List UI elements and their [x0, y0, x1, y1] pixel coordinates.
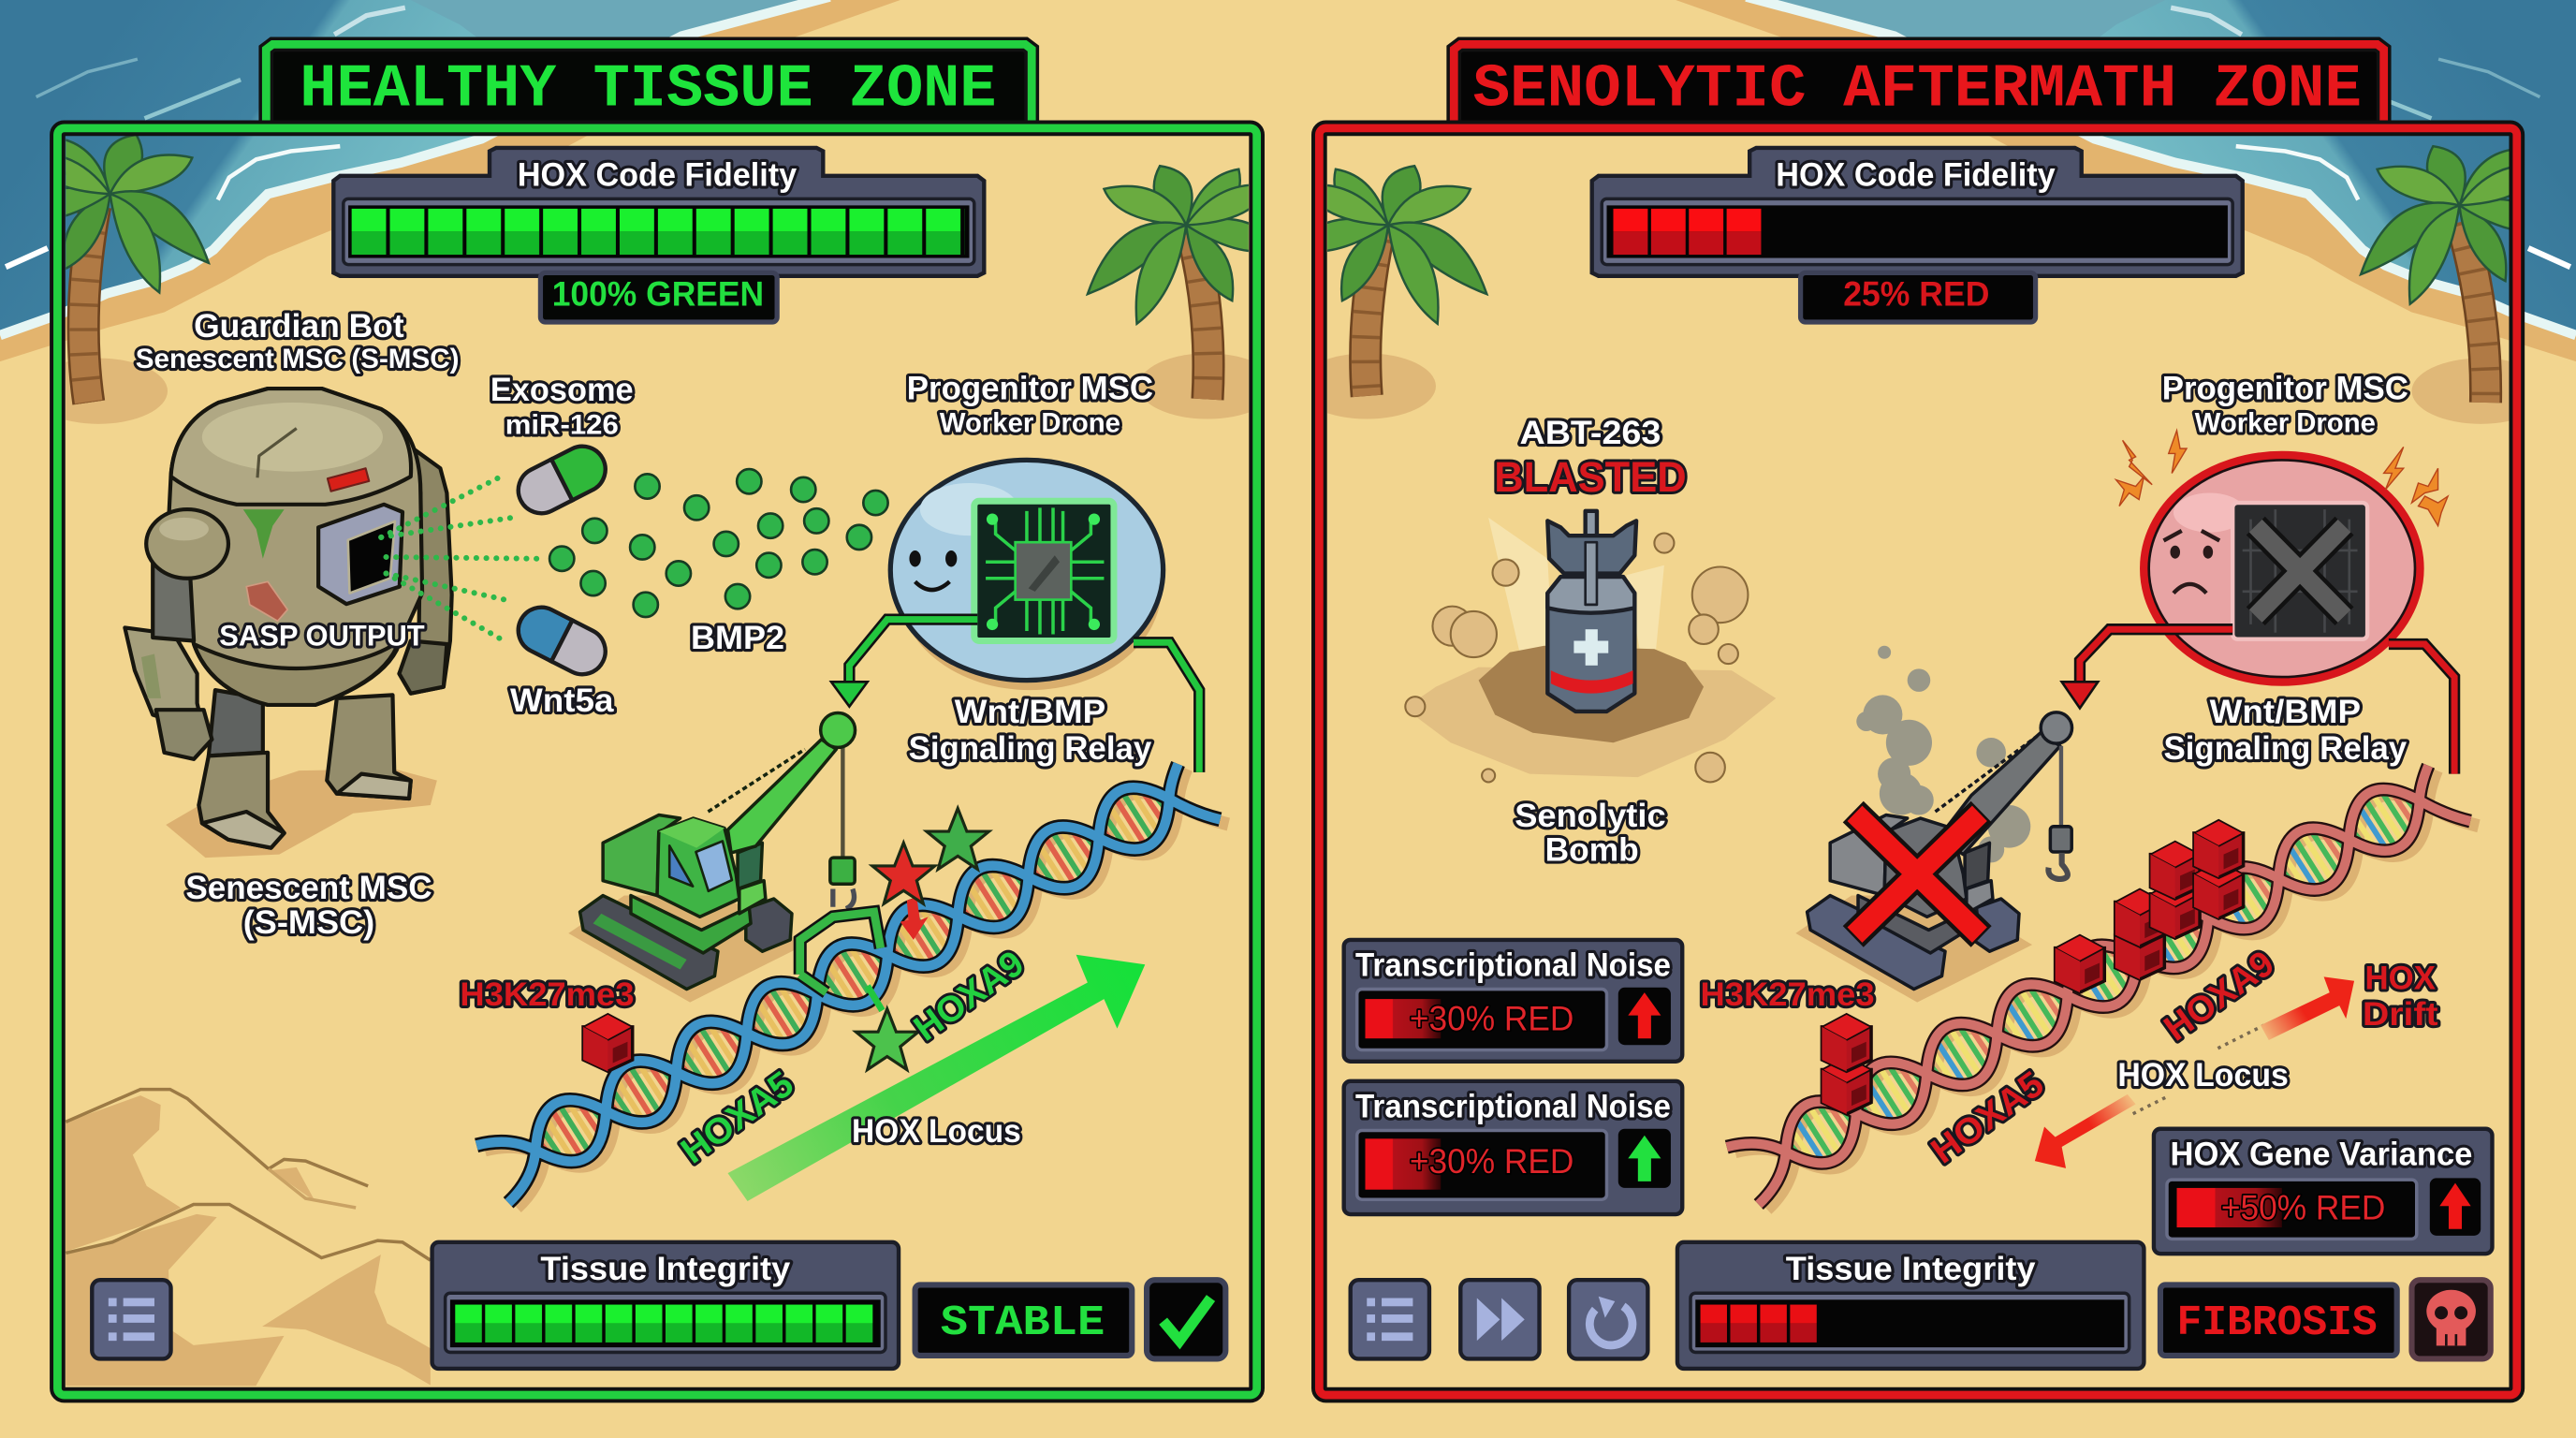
label: Wnt/BMP aftermath: Wnt/BMP — [2210, 694, 2361, 730]
gauge: tissue integrity healthy — [432, 1242, 899, 1369]
connector: signal to crane healthy — [831, 620, 977, 707]
bar: 14 green segments — [455, 1305, 875, 1343]
bar: 4 red segments — [1614, 209, 1761, 255]
crane: green — [568, 713, 856, 1003]
smoke — [1856, 646, 2030, 862]
label: Progenitor MSC aftermath: Progenitor MSC — [2162, 370, 2408, 406]
crater and dust — [1405, 518, 1776, 782]
heading: Transcriptional Noise — [1355, 947, 1671, 984]
SASP window — [318, 505, 402, 604]
sparks — [2116, 431, 2448, 526]
trend arrow: red up — [1618, 988, 1671, 1045]
red X over crane — [1853, 812, 1982, 936]
label: (S-MSC): (S-MSC) — [243, 904, 374, 941]
value: +50% RED — [2221, 1188, 2385, 1226]
label: Progenitor MSC healthy: Progenitor MSC — [907, 370, 1153, 406]
gauge: HOX code fidelity aftermath — [1592, 148, 2243, 276]
status: FIBROSIS: FIBROSIS — [2177, 1299, 2378, 1347]
icon: check — [1147, 1280, 1225, 1358]
label: Signaling Relay aftermath: Signaling Relay — [2163, 730, 2408, 767]
label: ABT-263: ABT-263 — [1519, 415, 1661, 451]
label: Exosome: Exosome — [490, 372, 634, 408]
ocean and shoreline: right — [1676, 0, 2576, 361]
label: Worker Drone healthy: Worker Drone — [940, 408, 1120, 439]
sad face — [2163, 531, 2219, 594]
label: Bomb: Bomb — [1545, 832, 1639, 869]
panel: senolytic aftermath zone frame — [1319, 128, 2517, 1395]
readout: 25% RED — [1801, 272, 2036, 322]
SASP dotted spray — [381, 477, 537, 639]
label: Wnt/BMP healthy: Wnt/BMP — [955, 694, 1105, 730]
ocean and shoreline: left — [0, 0, 900, 361]
small red arrow on DNA — [900, 897, 929, 940]
arrow: HOX drift down — [2035, 1094, 2165, 1168]
palm tree: right panel left — [1327, 165, 1488, 419]
label: miR-126: miR-126 — [505, 409, 619, 440]
heading: Transcriptional Noise — [1355, 1088, 1671, 1124]
button: menu aftermath — [1351, 1280, 1429, 1358]
title tab: aftermath — [1454, 44, 2384, 128]
status: STABLE — [915, 1284, 1132, 1356]
label: HOXA9 aftermath: HOXA9 — [2157, 943, 2281, 1049]
pill: Wnt5a — [510, 599, 613, 682]
label: Senescent MSC subtitle: Senescent MSC (S-MSC) — [136, 344, 460, 374]
heading: HOX Code Fidelity: HOX Code Fidelity — [1776, 156, 2056, 193]
label: Worker Drone aftermath: Worker Drone — [2195, 408, 2376, 439]
palm tree: left panel left — [66, 136, 211, 424]
title text: healthy: HEALTHY TISSUE ZONE — [300, 55, 996, 124]
title text: aftermath: SENOLYTIC AFTERMATH ZONE — [1472, 55, 2362, 124]
face — [909, 550, 957, 590]
bar: 16 green segments — [352, 209, 964, 255]
bomb — [1547, 511, 1636, 712]
label: HOXA5 aftermath: HOXA5 — [1924, 1064, 2051, 1172]
trend arrow: red up — [2430, 1178, 2481, 1236]
connector: signal to crane aftermath — [2062, 629, 2232, 708]
label: H3K27me3 aftermath: H3K27me3 — [1701, 976, 1875, 1013]
readout: 100% GREEN: 100% GREEN — [552, 274, 764, 313]
bar: 4 red segments — [1701, 1305, 1819, 1343]
label: Signaling Relay healthy: Signaling Relay — [909, 730, 1152, 767]
label: HOX Locus aftermath: HOX Locus — [2117, 1057, 2289, 1093]
label: Senolytic: Senolytic — [1515, 798, 1666, 834]
label: HOXA9 healthy: HOXA9 — [907, 943, 1032, 1049]
icon: skull — [2411, 1280, 2491, 1358]
value: +30% RED — [1410, 1142, 1573, 1181]
palm tree: left panel right — [1086, 165, 1249, 419]
heading: Tissue Integrity healthy: Tissue Integrity — [540, 1251, 791, 1287]
palm tree: right panel right — [2359, 144, 2509, 424]
DNA helix: healthy HOX locus — [476, 751, 1228, 1219]
arrow: healthy HOX locus direction — [728, 955, 1145, 1201]
DNA helix: degraded HOX locus — [1727, 753, 2479, 1220]
status: STABLE: STABLE — [941, 1299, 1105, 1347]
label: BMP2: BMP2 — [691, 620, 784, 656]
trend arrow: green up — [1618, 1129, 1671, 1188]
label: Senescent MSC: Senescent MSC — [185, 870, 432, 906]
worker drone: healthy progenitor cell — [890, 460, 1164, 690]
status: FIBROSIS — [2160, 1284, 2397, 1356]
connector: relay to DNA aftermath — [2389, 644, 2454, 774]
robot: guardian bot — [124, 389, 452, 858]
desert dunes — [66, 1090, 431, 1386]
label: Drift: Drift — [2363, 996, 2438, 1033]
panel: transcriptional noise 1 — [1344, 940, 1682, 1062]
button: refresh — [1569, 1280, 1647, 1358]
methyl block: H3K27me3 healthy — [583, 1014, 633, 1071]
label: H3K27me3 healthy: H3K27me3 — [460, 976, 634, 1013]
connector: relay to DNA healthy — [1134, 642, 1199, 772]
panel: transcriptional noise 2 — [1344, 1081, 1682, 1214]
crane: wrecked grey — [1795, 712, 2072, 1003]
label: SASP OUTPUT: SASP OUTPUT — [219, 619, 425, 653]
worker drone: damaged progenitor cell — [2144, 455, 2420, 682]
value: +30% RED — [1410, 999, 1573, 1037]
button: fast forward — [1460, 1280, 1540, 1358]
heading: HOX Gene Variance — [2170, 1136, 2472, 1172]
gauge: tissue integrity aftermath — [1677, 1242, 2144, 1369]
pill: exosome — [510, 438, 613, 521]
star: green lower — [856, 1009, 918, 1070]
label: BLASTED: BLASTED — [1494, 453, 1687, 501]
label: Guardian Bot: Guardian Bot — [194, 308, 404, 345]
BMP2 particles — [549, 469, 888, 617]
readout: 25% RED: 25% RED — [1843, 274, 1989, 313]
star: red — [872, 843, 935, 903]
palm trees — [15, 135, 2554, 424]
label: HOX Locus healthy: HOX Locus — [852, 1113, 1021, 1150]
label: Wnt5a: Wnt5a — [510, 682, 614, 719]
label: HOXA5 healthy: HOXA5 — [674, 1064, 801, 1172]
chip — [974, 501, 1114, 640]
arrow: HOX drift up — [2217, 976, 2354, 1049]
heading: Tissue Integrity aftermath: Tissue Integrity — [1786, 1251, 2036, 1287]
dead chip — [2232, 503, 2367, 639]
label: HOX: HOX — [2364, 961, 2437, 997]
methyl block stack: H3K27me3 aftermath — [1822, 820, 2244, 1114]
heading: HOX Code Fidelity: HOX Code Fidelity — [518, 156, 798, 193]
star: green upper — [927, 809, 989, 869]
button: menu healthy — [92, 1280, 171, 1358]
panel: HOX gene variance — [2154, 1129, 2492, 1254]
gauge: HOX code fidelity healthy — [333, 148, 984, 276]
panel: healthy tissue zone frame — [57, 128, 1257, 1395]
claw: green grabber on DNA — [800, 912, 882, 1010]
title tab: healthy — [266, 44, 1032, 128]
